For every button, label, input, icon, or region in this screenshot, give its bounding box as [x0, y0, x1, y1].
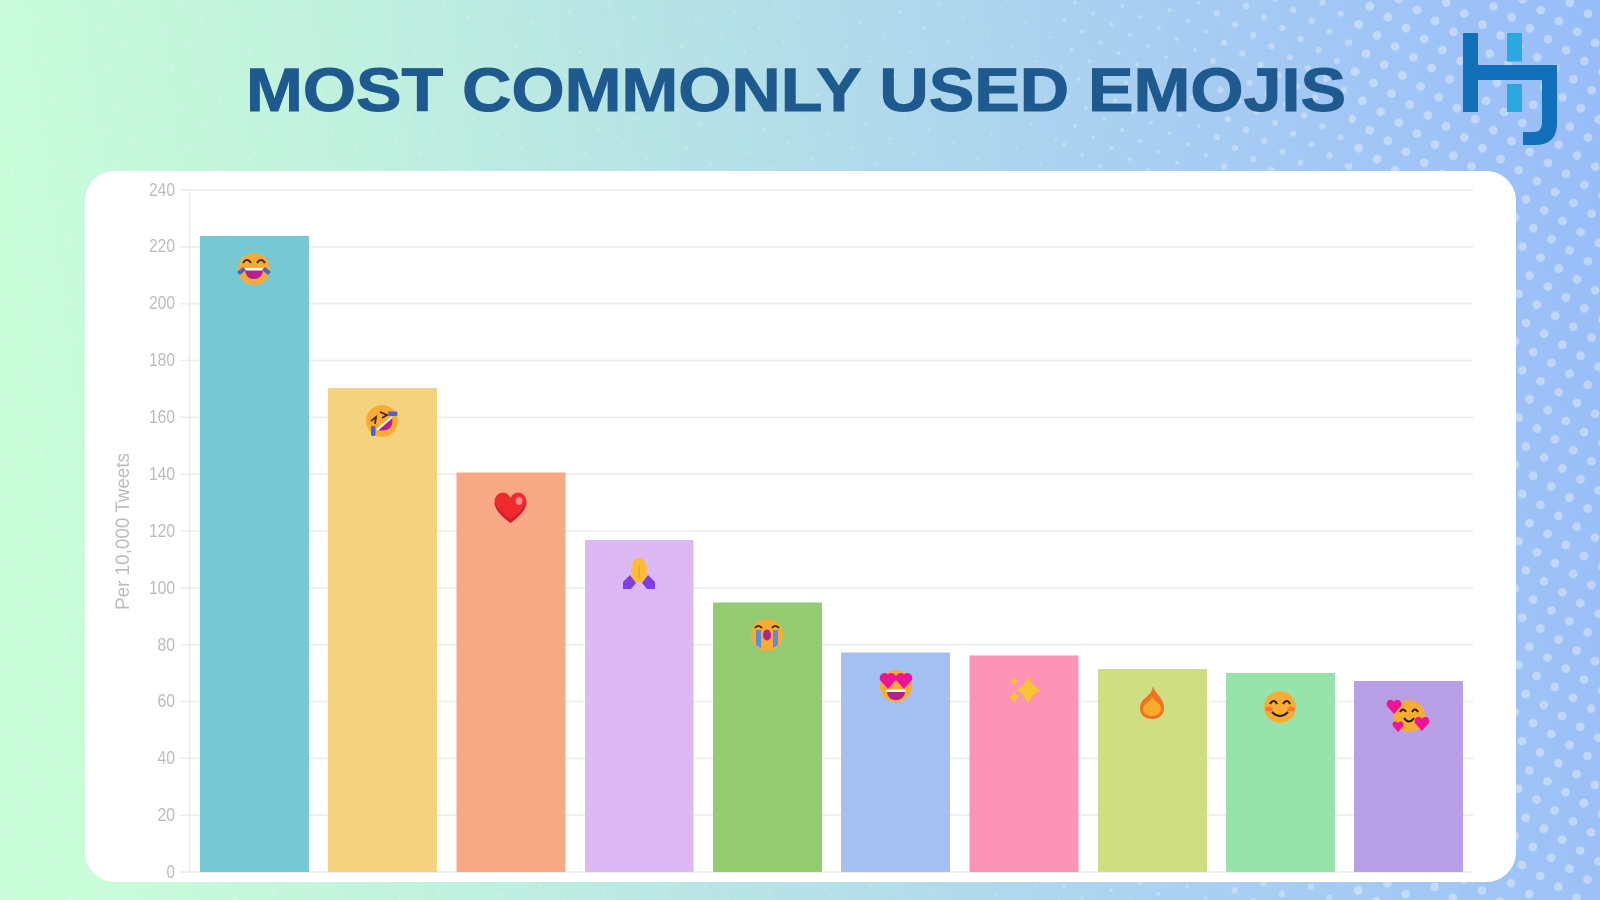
- title: MOST COMMONLY USED EMOJIS: [246, 56, 1346, 124]
- y axis labels: 0: [166, 862, 175, 882]
- y axis labels: 200: [149, 293, 175, 313]
- y axis labels: 140: [149, 464, 175, 484]
- icon: smiling face with smiling eyes: [1264, 691, 1296, 723]
- icon: loudly crying face: [751, 619, 783, 651]
- icon: fire: [1140, 686, 1164, 719]
- y axis labels: 120: [149, 521, 175, 541]
- bars: [200, 236, 1463, 872]
- y axis labels: 180: [149, 350, 175, 370]
- y axis labels: 60: [158, 691, 175, 711]
- y axis title: Per 10,000 Tweets: [113, 453, 134, 610]
- y axis labels: [149, 180, 175, 882]
- panel: chart card: [85, 171, 1516, 882]
- icon: face with tears of joy: [237, 253, 271, 285]
- y axis labels: 220: [149, 236, 175, 256]
- y axis labels: 40: [158, 748, 175, 768]
- icon: smiling face with hearts: [1387, 700, 1429, 732]
- icon: sparkles: [1009, 675, 1041, 705]
- y axis labels: 100: [149, 578, 175, 598]
- icon: folded hands: [623, 558, 655, 589]
- y axis labels: 240: [149, 180, 175, 200]
- grid lines and axis: [180, 190, 1473, 872]
- y axis labels: 80: [158, 635, 175, 655]
- bar chart: [113, 180, 1473, 882]
- icon: red heart: [494, 493, 526, 523]
- icon: smiling face with heart eyes: [880, 670, 912, 702]
- icon: rolling on the floor laughing: [366, 405, 398, 437]
- y axis labels: 160: [149, 407, 175, 427]
- y axis labels: 20: [158, 805, 175, 825]
- logo: [1463, 33, 1557, 145]
